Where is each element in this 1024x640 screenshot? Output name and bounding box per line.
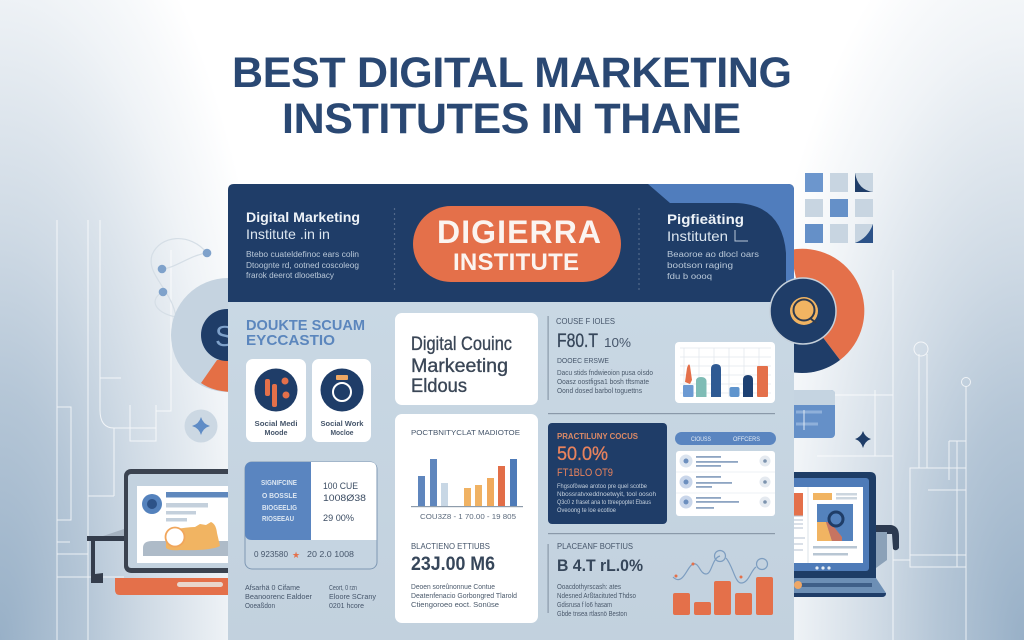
icon card 1 xyxy=(246,359,306,442)
header right text: fdu b oooq xyxy=(667,272,712,281)
left laptop xyxy=(87,469,244,595)
navy stat card: Q3c0 z fraset ana to ttreepoptet Ebaus xyxy=(557,499,652,506)
ticket stats card xyxy=(245,462,377,569)
centre chart card: COU3Z8 - 1 70.00 - 19 805 xyxy=(420,512,516,521)
ticket stats card: ★ xyxy=(292,550,300,560)
icon card 2: Mocloe xyxy=(330,428,354,437)
placement block: Ooacdothyrscash: ates xyxy=(557,584,621,591)
bar chart xyxy=(411,459,523,507)
centre chart card: BLACTIENO ETTIUBS xyxy=(411,542,490,551)
main panel xyxy=(228,300,794,640)
ticket stats card: 1008Ø38 xyxy=(323,493,366,503)
left donut chart xyxy=(171,278,285,392)
centre chart card xyxy=(395,414,538,623)
navy stat card xyxy=(548,423,667,524)
network nodes decoration xyxy=(151,239,211,317)
title: BEST DIGITAL MARKETING xyxy=(232,49,792,97)
header right text: bootson raging xyxy=(667,261,733,270)
left column footnotes: Eloore SCrany xyxy=(329,594,377,601)
left column footnotes: Afsarhä 0 Cifame xyxy=(245,585,300,592)
placement block: B 4.T rL.0% xyxy=(557,556,643,575)
right donut chart xyxy=(780,249,864,373)
centre title card xyxy=(395,313,538,405)
right decorative squares xyxy=(805,173,873,243)
header left text xyxy=(246,209,360,280)
left column footnotes xyxy=(245,585,377,610)
right laptop xyxy=(780,472,899,597)
logo pill: DIGIERRA xyxy=(437,214,601,250)
header right text: Pigfieäting xyxy=(667,211,744,227)
left column heading xyxy=(246,317,365,349)
list card xyxy=(676,451,775,516)
ticket stats card: RIOSEEAU xyxy=(262,514,294,523)
placement combo chart xyxy=(673,550,773,615)
header right text: Instituten xyxy=(667,228,728,244)
left column footnotes: Ooeaßdon xyxy=(245,603,275,610)
centre title card: Digital Couinc xyxy=(411,334,512,355)
icon card 1: Social Medi xyxy=(254,419,298,428)
left donut chart: S xyxy=(215,321,234,353)
navy stat card: FT1BLO OT9 xyxy=(557,467,613,479)
centre title card: Eldous xyxy=(411,376,467,397)
header banner xyxy=(228,184,794,302)
header left text: Digital Marketing xyxy=(246,209,360,225)
course fees block: 10% xyxy=(604,335,631,350)
navy stat card: Oveoong te loe ecotloe xyxy=(557,507,616,514)
ticket stats card: 0 923580 xyxy=(254,550,289,559)
logo pill xyxy=(413,206,621,282)
list header pill: OFFCERS xyxy=(733,437,760,443)
centre chart card: Deatenfenacio Gorbongred Tlarold xyxy=(411,593,517,600)
ticket stats card: 100 CUE xyxy=(323,481,358,491)
icon card 2: Social Work xyxy=(320,419,364,428)
centre chart card: POCTBNITYCLAT MADIOTOE xyxy=(411,428,520,437)
sparkle badge left xyxy=(184,410,218,442)
small blue card right xyxy=(780,390,835,438)
ticket stats card: O BOSSLE xyxy=(262,491,297,500)
title: INSTITUTES IN THANE xyxy=(282,95,741,143)
ticket stats card: SIGNIFCINE xyxy=(261,478,297,487)
ticket stats card: 20 2.0 1008 xyxy=(307,550,355,559)
header left text: Dtoognte rd, ootned coscoleog xyxy=(246,261,359,270)
course fees block xyxy=(548,316,653,400)
centre chart card: Ctiengoroeo eoct. Sonüse xyxy=(411,602,499,609)
header right text xyxy=(667,211,759,281)
navy stat card: PRACTILUNY COCUS xyxy=(557,432,639,441)
ticket stats card: BIOGEELIG xyxy=(262,503,297,512)
course fees block: COUSE F IOLES xyxy=(556,317,615,326)
left column heading: EYCCASTIO xyxy=(246,332,335,349)
list header pill: CIOUSS xyxy=(691,437,711,443)
list header pill xyxy=(675,432,776,445)
placement block xyxy=(548,542,643,618)
sparkle right xyxy=(855,431,871,448)
course fees block: F80.T xyxy=(557,331,598,352)
centre chart card: 23J.00 M6 xyxy=(411,554,495,575)
placement block: Gbde tnsea rtlasnö Beston xyxy=(557,611,627,618)
ticket stats card: 29 00% xyxy=(323,513,354,523)
icon card 1: Moode xyxy=(264,428,288,437)
centre chart card: Deoen soreûnonnue Contue xyxy=(411,584,495,591)
navy stat card: Fhgsoföwae arotoo pre quel scotbe xyxy=(557,483,647,490)
left column heading: DOUKTE SCUAM xyxy=(246,317,365,334)
header left text: frarok deerot dlooetbacy xyxy=(246,271,334,280)
placement block: Gdisrusa f lo6 hasam xyxy=(557,602,612,609)
placement block: Ndesned Arßtacituted Thdso xyxy=(557,593,636,600)
centre title card: Markeeting xyxy=(411,356,508,377)
header right text: Beaoroe ao dlocl oars xyxy=(667,250,759,259)
course fees chart card xyxy=(675,342,775,403)
header left text: Btebo cuateldefinoc ears colin xyxy=(246,250,359,259)
donut centre badge xyxy=(770,278,836,344)
left column footnotes: 0201 hcore xyxy=(329,603,364,610)
title xyxy=(232,49,792,143)
course fees block: Dacu stids fndwieoion pusa oìsdo xyxy=(557,370,653,377)
navy stat card: Nbossratvxeddnoetwyit, tool oosoh xyxy=(557,491,656,498)
header left text: Institute .in in xyxy=(246,226,330,242)
navy stat card: 50.0% xyxy=(557,444,608,465)
divider xyxy=(548,413,775,414)
left column footnotes: Ceort, 0 rzn xyxy=(329,585,357,592)
divider xyxy=(548,533,775,534)
logo pill: INSTITUTE xyxy=(453,249,579,276)
course fees block: DOOEC ERSWE xyxy=(557,358,609,365)
course fees block: Oond dosed barbol toguettns xyxy=(557,388,642,395)
course fees block: Ooasz oostfigsa1 bosh tftsmate xyxy=(557,379,649,386)
placement block: PLACEANF BOFTIUS xyxy=(557,542,633,551)
left column footnotes: Beanoorenc Ealdoer xyxy=(245,594,313,601)
icon card 2 xyxy=(312,359,371,442)
